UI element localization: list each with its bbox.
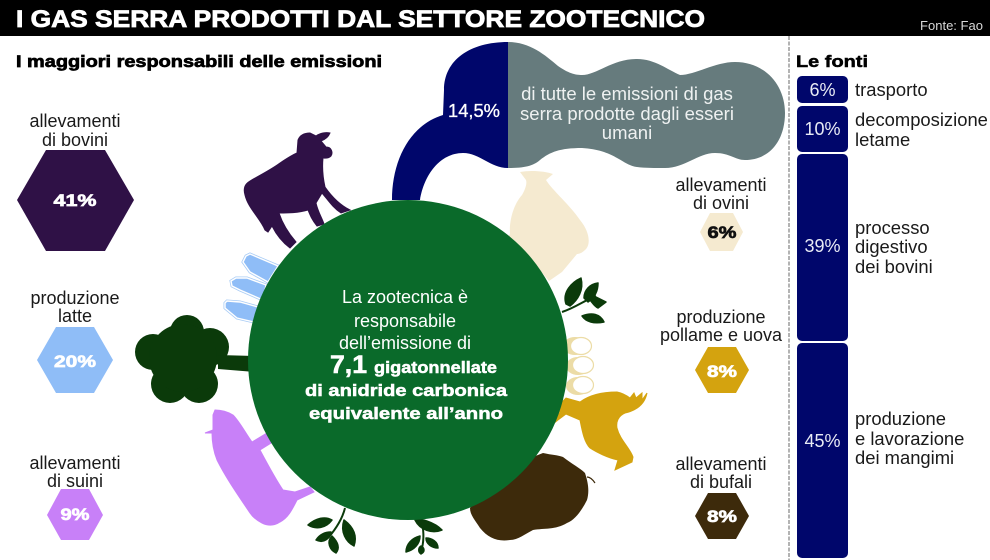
source: processo digestivo: dei bovini — [855, 256, 933, 277]
panel: buffalo share: di bufali — [690, 472, 752, 492]
panel: buffalo share — [675, 454, 767, 539]
central green circle: di anidride carbonica — [305, 382, 508, 400]
source: mangimi — [797, 343, 964, 558]
panel: milk share: 20% — [54, 352, 96, 371]
source: mangimi: e lavorazione — [855, 428, 964, 449]
panel: pig share: di suini — [47, 471, 103, 491]
cloud text: di tutte le emissioni di gas — [521, 83, 733, 104]
central green circle: dell’emissione di — [339, 333, 471, 353]
panel: pig share — [29, 453, 121, 540]
panel: sheep share: allevamenti — [675, 175, 767, 195]
panel: pig share: 9% — [60, 505, 90, 524]
icon: leaf sprig right — [562, 278, 606, 323]
icon: leaf sprig bottom right — [406, 518, 442, 554]
panel: pig share: allevamenti — [29, 453, 121, 473]
panel: poultry share: pollame e uova — [660, 325, 783, 345]
source: trasporto: 6% — [809, 80, 836, 100]
icon: rooster — [553, 392, 647, 470]
circle text: La zootecnica è — [342, 287, 468, 307]
emissions speech cloud: serra prodotte dagli esseri — [520, 103, 734, 124]
source: decomposizione letame — [797, 106, 988, 152]
source: decomposizione letame: letame — [855, 129, 910, 150]
panel: poultry share: 8% — [707, 362, 737, 381]
panel: bovine share: 41% — [54, 191, 96, 210]
source: mangimi: produzione — [855, 408, 946, 429]
panel: poultry share — [660, 307, 783, 393]
icon: leaf sprig bottom left — [308, 508, 355, 553]
source: processo digestivo: digestivo — [855, 236, 928, 257]
icon: sheep — [498, 171, 589, 281]
left heading: I maggiori responsabili delle emissioni — [16, 52, 382, 71]
panel: sheep share: 6% — [708, 223, 736, 242]
header bar — [0, 0, 990, 36]
icon: eggs — [563, 337, 594, 395]
central green circle: gigatonnellate — [374, 359, 497, 377]
grey cloud — [508, 42, 785, 168]
source: processo digestivo: 39% — [804, 236, 841, 256]
panel: bovine share — [17, 111, 134, 251]
panel: milk share: produzione — [30, 288, 120, 308]
central green circle — [248, 200, 568, 520]
central green circle: responsabile — [354, 311, 456, 331]
icon: tree — [135, 315, 255, 403]
panel: le fonti — [796, 52, 988, 558]
source: trasporto: trasporto — [855, 79, 928, 100]
emissions speech cloud: umani — [602, 122, 652, 143]
title: I GAS SERRA PRODOTTI DAL SETTORE ZOOTECNICO — [16, 6, 705, 33]
source: mangimi: dei mangimi — [855, 447, 954, 468]
icon: pig — [205, 410, 314, 525]
central green circle: 7,1 — [330, 351, 367, 379]
panel: buffalo share: allevamenti — [675, 454, 767, 474]
sources heading: Le fonti — [796, 52, 868, 71]
panel: sheep share: di ovini — [693, 193, 749, 213]
emissions speech cloud — [392, 42, 785, 200]
panel: bovine share: allevamenti — [29, 111, 121, 131]
panel: buffalo share: 8% — [707, 507, 737, 526]
source: processo digestivo — [797, 154, 933, 341]
panel: poultry share: produzione — [676, 307, 766, 327]
panel: bovine share: di bovini — [42, 130, 108, 150]
source: processo digestivo: processo — [855, 217, 930, 238]
percentage: 14,5% — [448, 101, 500, 121]
panel: milk share — [30, 288, 120, 393]
source: trasporto — [797, 76, 928, 103]
icon: buffalo — [470, 453, 595, 540]
source: mangimi: 45% — [804, 431, 841, 451]
panel: milk share: latte — [58, 306, 92, 326]
panel: sheep share — [675, 175, 767, 251]
source note: Fonte: Fao — [920, 18, 983, 33]
icon: milk bottles — [225, 254, 278, 322]
source: decomposizione letame: decomposizione — [855, 109, 988, 130]
central green circle: equivalente all’anno — [309, 405, 503, 423]
source: decomposizione letame: 10% — [804, 119, 841, 139]
icon: cow — [244, 133, 350, 248]
navy pipe — [392, 42, 508, 200]
